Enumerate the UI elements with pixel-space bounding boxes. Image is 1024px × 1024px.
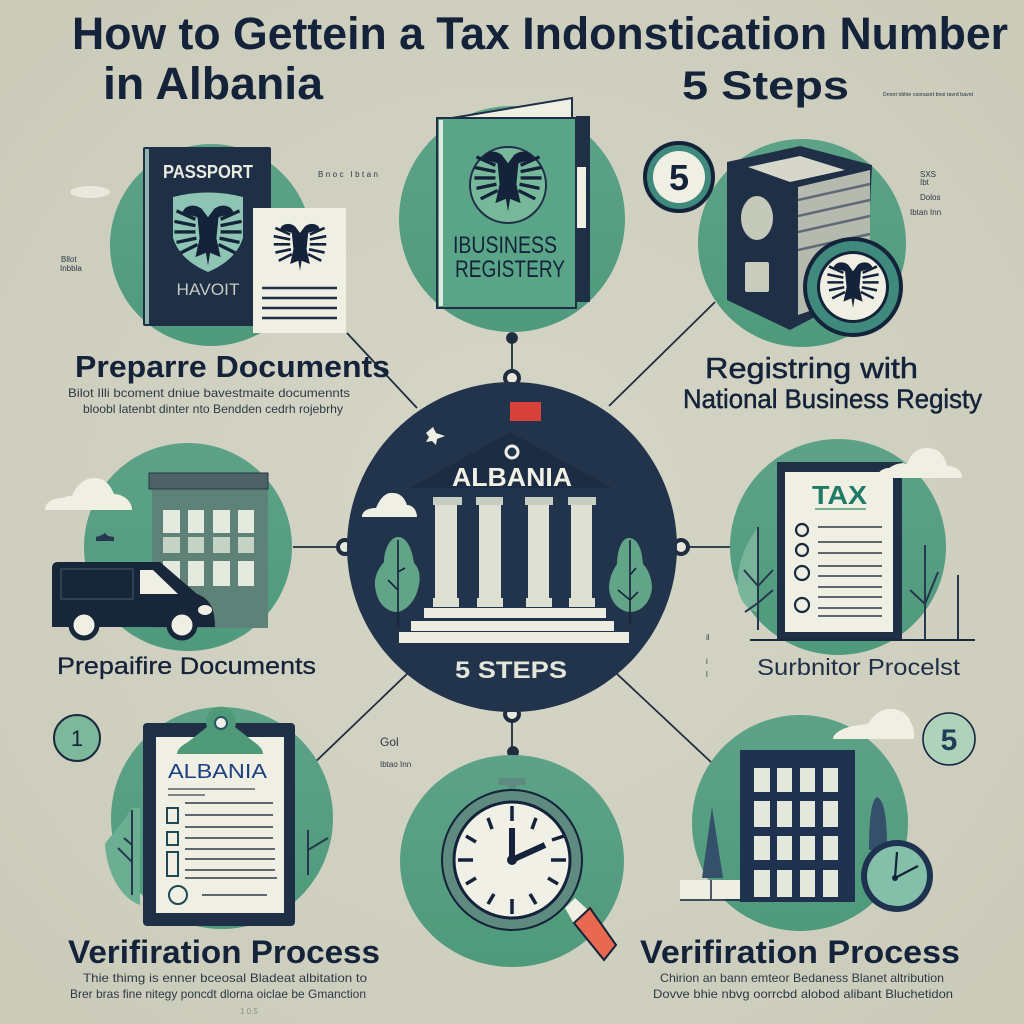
text block: verification left [70,971,367,1016]
connector lines [293,302,730,767]
icon: passport [143,147,271,326]
small labels: Inbbla [60,264,82,273]
small labels: Ibt [920,178,930,187]
icon: file box [727,146,903,337]
text block: verification left: Thie thimg is enner bceosal Bladeat albitation to [83,971,367,985]
panel: business registry [399,98,625,332]
icon: base block [680,880,740,900]
icon: registry book [437,98,590,308]
small labels: Ibtao Inn [380,760,411,769]
icon: cloud [362,493,417,517]
panel: tax form [730,439,975,655]
badge: number 5: 5 [669,157,689,198]
icon: tree left [375,537,420,626]
panel: clock [400,755,624,967]
badge: number 5 [923,713,975,765]
icon: bird mark [96,533,114,541]
badge: step number: 1 [71,726,83,751]
small labels: i [706,657,708,666]
small labels: Bnoc Ibtan [318,170,378,179]
small labels [60,170,941,769]
text block: verification right: Chirion an bann emteor Bedaness Blanet altribution [660,971,944,985]
heading: registering [683,353,982,414]
heading: registering: Registring with [705,353,918,385]
small labels: Ibtan Inn [910,208,941,217]
icon: registry book: IBUSINESS [453,232,557,259]
icon: cloud [833,709,914,739]
icon: small cloud [70,186,110,198]
badge: step number [54,715,100,761]
title: 5 Steps [682,64,849,108]
badge: number 5: 5 [941,724,957,757]
panel: passport documents [70,144,346,346]
title: How to Gettein a Tax Indonstication Number [72,8,1008,59]
icon: van [52,562,215,638]
icon: document with eagle [253,208,346,333]
small labels: Dolos [920,193,940,202]
icon: registry book: REGISTERY [455,256,565,283]
icon: tax document: TAX [812,480,868,510]
heading: prepare documents: Preparre Documents [75,349,390,384]
text block: prepare documents [68,386,350,416]
icon: building with columns [399,432,629,643]
small labels: l [706,670,708,679]
small labels: Gol [380,735,399,749]
icon: small clock [861,840,933,912]
text block: prepare documents: Bilot Illi bcoment dniue bavestmaite documennts [68,386,350,400]
icon: building with columns: ALBANIA [452,462,572,492]
panel: office and van [45,443,292,651]
icon: clipboard: ALBANIA [168,761,268,783]
icon: trees [702,807,723,878]
icon: small plane [426,427,445,445]
heading: verification process right: Verifiration Process [640,934,960,970]
badge: number 5 [645,143,713,211]
heading: prepare documents 2: Prepaifire Documents [57,653,316,680]
label: 5 steps: 5 STEPS [455,657,567,684]
icon: tree right [609,538,652,625]
icon: trees [105,808,328,905]
icon: clipboard [143,707,295,926]
small labels: il [706,633,710,642]
central circle: Albania [347,382,677,712]
small labels: SXS [920,170,936,179]
heading: verification process left: Verifiration Process [68,934,380,970]
icon: passport: PASSPORT [163,162,253,182]
icon: passport: HAVOIT [176,280,240,299]
icon: office building [149,473,268,628]
icon: cloud [45,478,132,510]
icon: trees [738,527,958,640]
title: in Albania [103,58,324,109]
panel: office and clock [680,709,975,931]
text block: verification right [653,971,953,1001]
icon: flag [510,402,541,421]
icon: tax document [777,462,902,641]
title: Dnnot nbhie coonasnt bnoi tavrd bavot [883,92,974,98]
text block: prepare documents: bloobl latenbt dinter nto Bendden cedrh rojebrhy [83,402,343,416]
text block: verification left: Brer bras fine nitegy poncdt dlorna oiclae be Gmanction [70,987,366,1001]
text block: verification left: 1 0.5 [240,1007,258,1016]
icon: clock magnifier [442,778,616,960]
icon: cloud [877,448,962,478]
title [72,8,1008,109]
text block: verification right: Dovve bhie nbvg oorrcbd alobod alibant Bluchetidon [653,987,953,1001]
panel: verification clipboard [54,707,333,929]
small labels: Bllot [61,255,77,264]
heading: registering: National Business Registy [683,384,982,414]
heading: submission process: Surbnitor Procelst [757,654,961,680]
panel: national business registry [645,139,906,347]
icon: office building [740,750,855,902]
